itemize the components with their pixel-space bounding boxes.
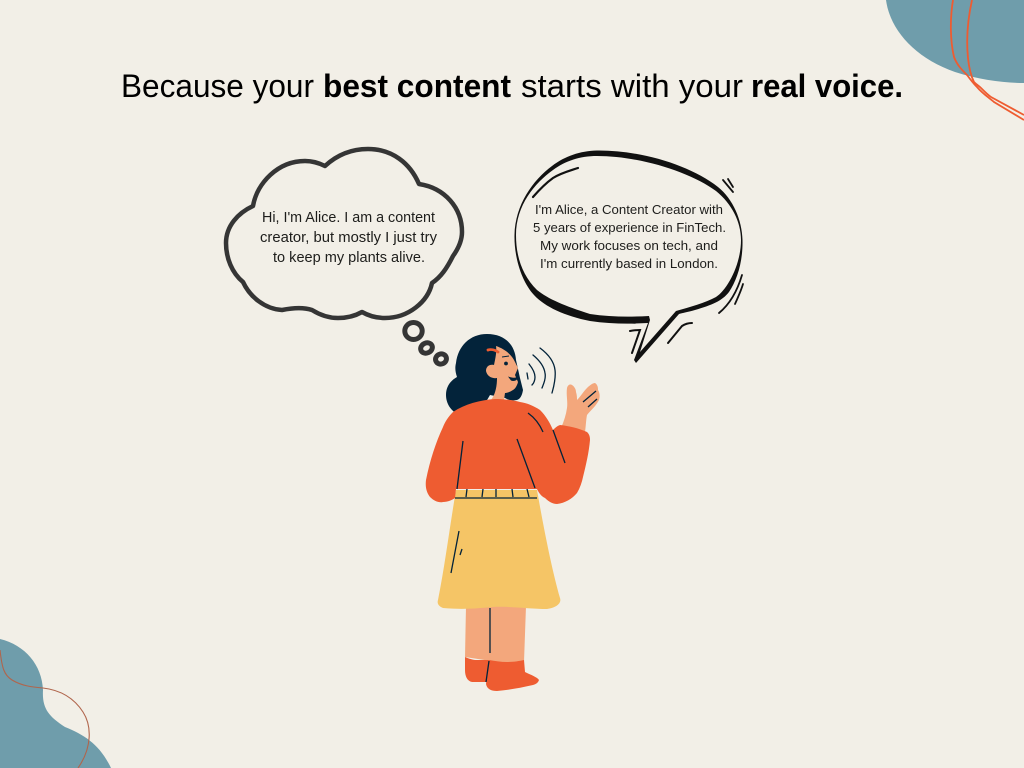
decoration: top right blob with orange lines [886, 0, 1024, 120]
neck and face [486, 346, 518, 400]
title: starts with your [521, 68, 743, 104]
sweater [426, 399, 590, 504]
hair clip [488, 350, 498, 352]
thought dots [405, 322, 448, 366]
speech text: I'm currently based in London. [540, 256, 718, 271]
back boot [465, 657, 489, 682]
leg and boot line [486, 608, 490, 682]
title: Because your [121, 68, 314, 104]
cloud outline [226, 149, 462, 318]
thought text [260, 210, 438, 266]
speech text [533, 202, 726, 271]
decoration: bottom left blob with line [0, 639, 111, 768]
thought text: Hi, I'm Alice. I am a content [262, 210, 435, 226]
bubble accent strokes [533, 168, 743, 353]
bubble outline [514, 150, 743, 363]
eye and mouth [502, 356, 518, 381]
speech text: 5 years of experience in FinTech. [533, 220, 726, 235]
speech text: My work focuses on tech, and [540, 238, 718, 253]
skirt [438, 490, 560, 609]
skirt lines [451, 531, 462, 573]
waistband lines [455, 489, 537, 498]
back leg [465, 606, 491, 661]
speech text: I'm Alice, a Content Creator with [535, 202, 723, 217]
raised hand [561, 383, 600, 432]
speech bubble [514, 150, 743, 363]
thought text: creator, but mostly I just try [260, 230, 438, 246]
front boot [486, 660, 539, 691]
title [121, 68, 903, 104]
title: best content [323, 68, 511, 104]
character: woman speaking [426, 334, 600, 691]
title: real voice. [751, 68, 903, 104]
hand lines [583, 391, 597, 407]
thought bubble [226, 149, 462, 366]
thought text: to keep my plants alive. [273, 250, 425, 266]
sound waves [527, 348, 555, 393]
front leg [490, 606, 526, 662]
hair back [446, 334, 523, 416]
sweater fold lines [457, 413, 565, 489]
